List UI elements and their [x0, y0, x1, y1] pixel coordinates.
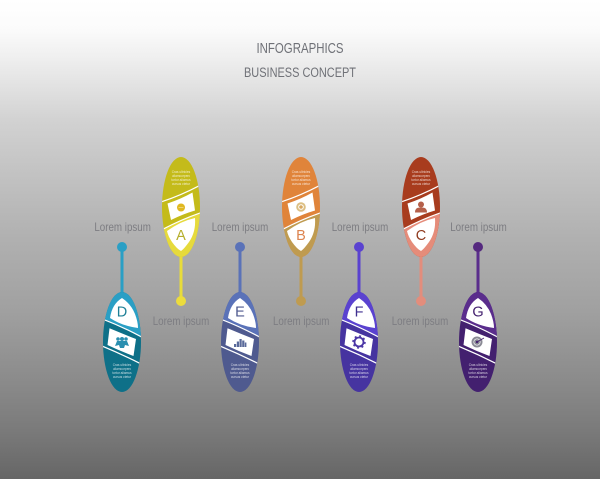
step E	[221, 242, 259, 392]
step B	[282, 157, 320, 306]
label D: Lorem ipsum	[94, 220, 151, 234]
text G	[468, 363, 488, 379]
oval G	[459, 292, 497, 392]
oval C	[402, 157, 440, 257]
label A: Lorem ipsum	[153, 314, 209, 328]
label B: Lorem ipsum	[273, 314, 329, 328]
stem C	[420, 255, 422, 301]
title: INFOGRAPHICS	[256, 40, 344, 57]
letter D: D	[117, 305, 127, 321]
text D: ullamcorperc	[113, 367, 132, 371]
text G: Cras ultricies	[469, 363, 488, 367]
text D: tortor aliamus	[112, 371, 132, 375]
dot B	[296, 296, 306, 306]
icon B	[296, 202, 306, 212]
text E: tortor aliamus	[230, 371, 250, 375]
letter B: B	[296, 228, 306, 244]
stem B	[300, 255, 302, 301]
text C: tortor aliamus	[411, 178, 431, 182]
stem E	[238, 247, 242, 294]
text C: Cras ultricies	[412, 170, 431, 174]
oval B	[282, 157, 320, 257]
text E: ullamcorperc	[231, 367, 250, 371]
oval E	[221, 292, 259, 392]
text D	[112, 363, 132, 379]
step G	[459, 242, 497, 392]
icon E	[234, 339, 246, 347]
text F: ullamcorperc	[350, 367, 369, 371]
letter C: C	[416, 228, 426, 244]
stem D	[120, 247, 124, 294]
text C	[411, 170, 431, 186]
label F: Lorem ipsum	[332, 220, 388, 234]
dot D	[117, 242, 127, 252]
text E	[230, 363, 250, 379]
text A: Cras ultricies	[172, 170, 191, 174]
dot E	[235, 242, 245, 252]
letter F: F	[355, 305, 364, 321]
dot F	[354, 242, 364, 252]
text F: cursus ctetur	[350, 375, 369, 379]
text A: tortor aliamus	[171, 178, 191, 182]
icon A	[177, 204, 185, 212]
text G: tortor aliamus	[468, 371, 488, 375]
icon C	[415, 202, 427, 212]
oval D	[103, 292, 141, 392]
stem G	[476, 247, 480, 294]
text B: tortor aliamus	[291, 178, 311, 182]
icon D	[115, 337, 129, 348]
stem A	[180, 255, 182, 301]
dot A	[176, 296, 186, 306]
text C: cursus ctetur	[412, 182, 431, 186]
text F: tortor aliamus	[349, 371, 369, 375]
text G: ullamcorperc	[469, 367, 488, 371]
text B: Cras ultricies	[292, 170, 311, 174]
subtitle: BUSINESS CONCEPT	[244, 65, 356, 80]
text A: ullamcorperc	[172, 174, 191, 178]
text A	[171, 170, 191, 186]
icon F	[353, 336, 365, 348]
label C: Lorem ipsum	[392, 314, 448, 328]
step D	[103, 242, 141, 392]
icon G	[472, 336, 484, 348]
label E: Lorem ipsum	[212, 220, 268, 234]
text B	[291, 170, 311, 186]
text E: cursus ctetur	[231, 375, 250, 379]
text F: Cras ultricies	[350, 363, 369, 367]
text B: ullamcorperc	[292, 174, 311, 178]
stem F	[358, 247, 360, 294]
text E: Cras ultricies	[231, 363, 250, 367]
letter G: G	[472, 305, 484, 321]
step A	[162, 157, 200, 306]
text B: cursus ctetur	[292, 182, 311, 186]
step F	[340, 242, 378, 392]
text G: cursus ctetur	[469, 375, 488, 379]
label G: Lorem ipsum	[450, 220, 507, 234]
text D: Cras ultricies	[113, 363, 132, 367]
dot C	[416, 296, 426, 306]
text D: cursus ctetur	[113, 375, 132, 379]
dot G	[473, 242, 483, 252]
letter A: A	[176, 228, 186, 244]
oval A	[162, 157, 200, 257]
text C: ullamcorperc	[412, 174, 431, 178]
letter E: E	[235, 305, 245, 321]
text A: cursus ctetur	[172, 182, 191, 186]
step C	[402, 157, 440, 306]
oval F	[340, 292, 378, 392]
text F	[349, 363, 369, 379]
